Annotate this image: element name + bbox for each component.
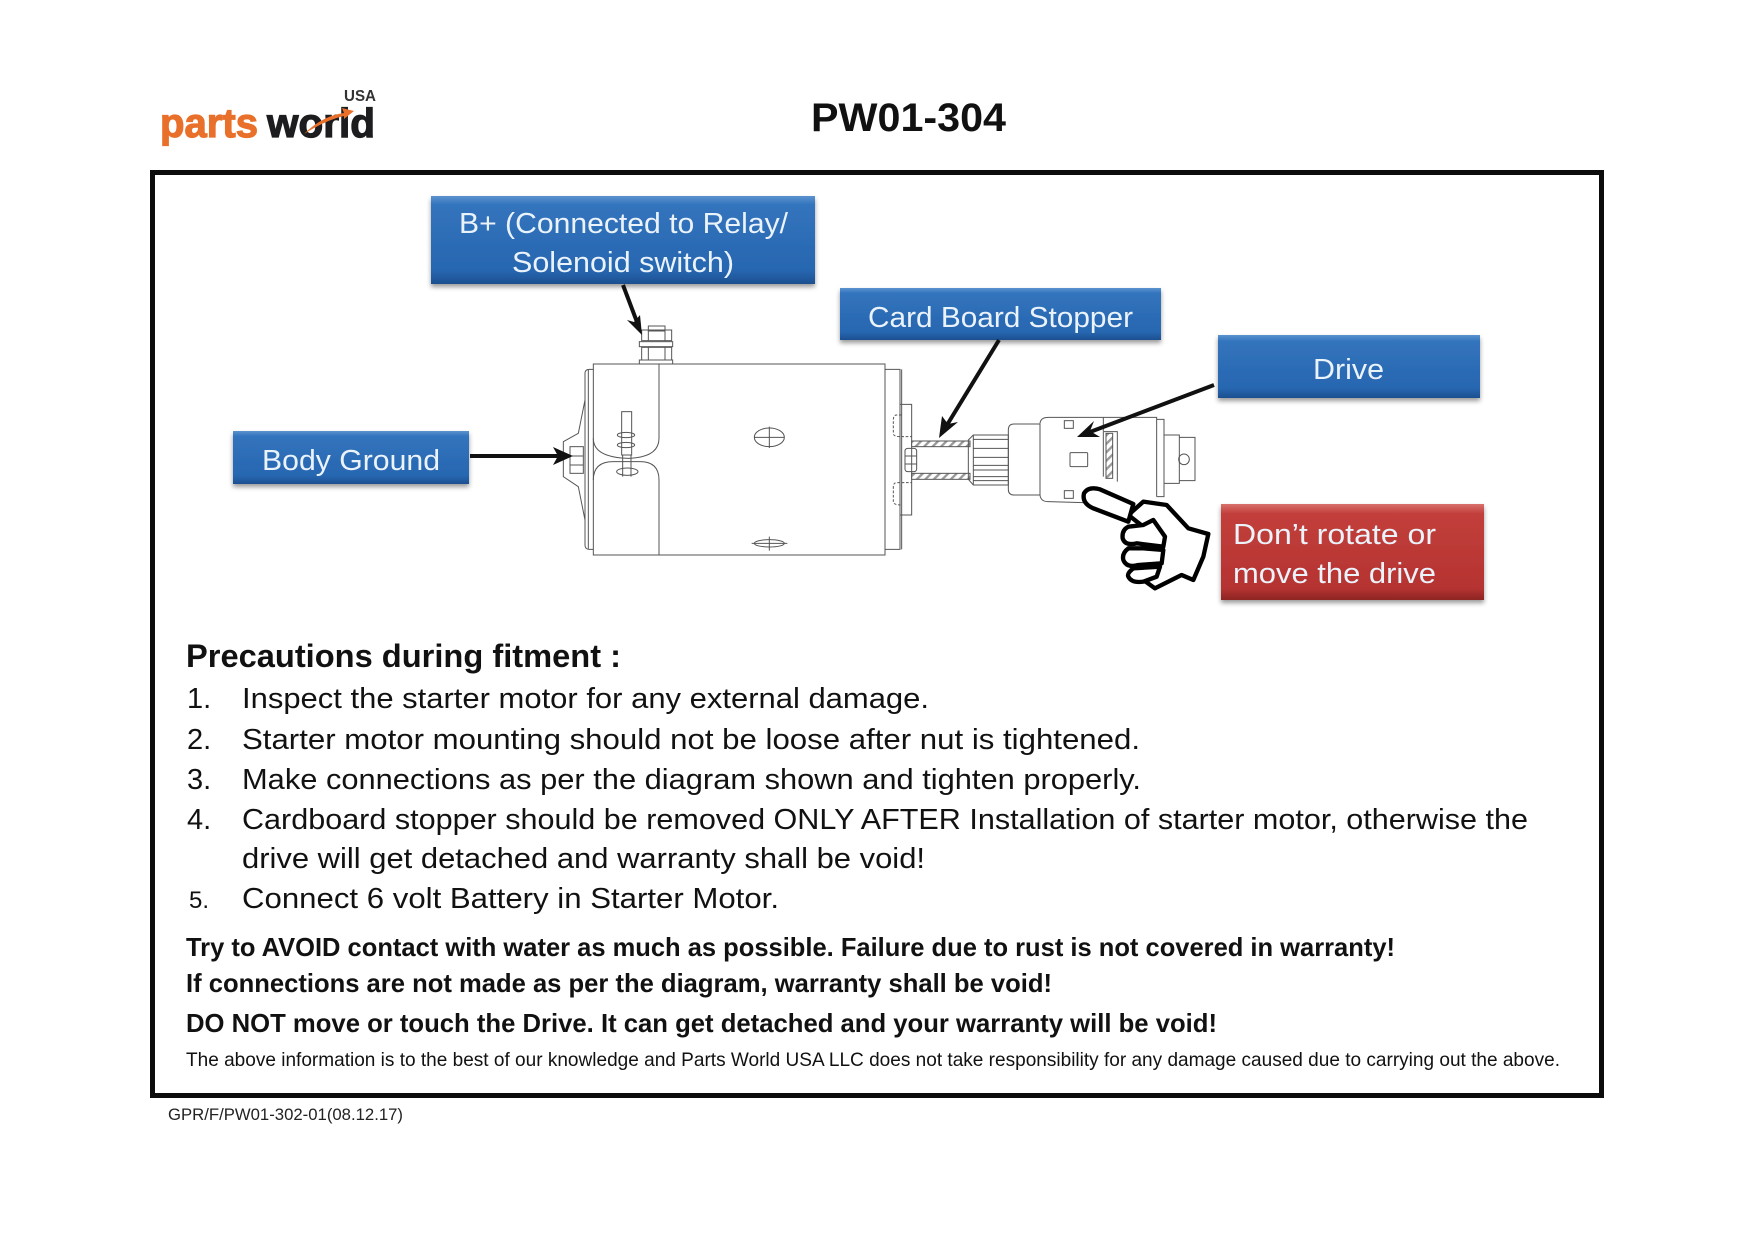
arrow: B+ to terminal <box>623 285 642 335</box>
precautions list: Make connections as per the diagram shown and tighten properly. <box>242 764 1141 796</box>
callout: Drive <box>1218 335 1480 398</box>
warnings: DO NOT move or touch the Drive. It can get detached and your warranty will be void! <box>186 1008 1217 1038</box>
callout: B+ <box>431 196 815 284</box>
document code: GPR/F/PW01-302-01(08.12.17) <box>168 1106 403 1124</box>
callout: warning: move the drive <box>1233 558 1436 590</box>
precautions list: Cardboard stopper should be removed ONLY AFTER Installation of starter motor, otherwise the <box>242 804 1528 836</box>
callout: Body Ground <box>233 431 469 484</box>
warnings <box>186 932 1395 1038</box>
precautions list: drive will get detached and warranty shall be void! <box>242 843 925 875</box>
callout: Card Board Stopper: Card Board Stopper <box>868 302 1133 334</box>
heading: precautions: Precautions during fitment : <box>186 638 621 674</box>
callout: Body Ground: Body Ground <box>262 445 440 477</box>
precautions list: Starter motor mounting should not be loose after nut is tightened. <box>242 724 1140 756</box>
title: PW01-304 <box>811 96 1007 140</box>
callout: Card Board Stopper <box>840 288 1161 340</box>
callout: Drive: Drive <box>1313 354 1384 386</box>
precautions list <box>187 683 1528 915</box>
precautions list: Inspect the starter motor for any external damage. <box>242 683 929 715</box>
arrow: card board stopper <box>939 340 999 438</box>
arrow: drive <box>1077 385 1214 437</box>
disclaimer: The above information is to the best of our knowledge and Parts World USA LLC does not take responsibility for any damage caused due to carrying out the above. <box>186 1049 1560 1071</box>
callout: warning: Don’t rotate or <box>1233 519 1436 551</box>
precautions list: 4. <box>187 804 211 836</box>
precautions list: 2. <box>187 724 211 756</box>
precautions list: 3. <box>187 764 211 796</box>
precautions list: 5. <box>189 887 209 914</box>
main frame <box>152 172 1602 1096</box>
precautions list: Connect 6 volt Battery in Starter Motor. <box>242 883 779 915</box>
callout: B+: Solenoid switch) <box>512 247 734 279</box>
starter motor drawing <box>563 326 970 555</box>
arrow: body ground <box>470 447 573 465</box>
warnings: If connections are not made as per the diagram, warranty shall be void! <box>186 968 1052 998</box>
precautions list: 1. <box>187 683 211 715</box>
callout: warning <box>1221 504 1484 600</box>
logo: parts world USA: USA <box>344 88 376 105</box>
icon: pointing hand <box>1084 488 1208 588</box>
callout: B+: B+ (Connected to Relay/ <box>459 208 789 240</box>
logo: parts world USA: parts <box>160 100 258 146</box>
logo: parts world USA <box>160 88 376 146</box>
starter drive assembly <box>968 417 1195 503</box>
logo: parts world USA: world <box>266 100 375 146</box>
warnings: Try to AVOID contact with water as much as possible. Failure due to rust is not covered in warranty! <box>186 932 1395 962</box>
